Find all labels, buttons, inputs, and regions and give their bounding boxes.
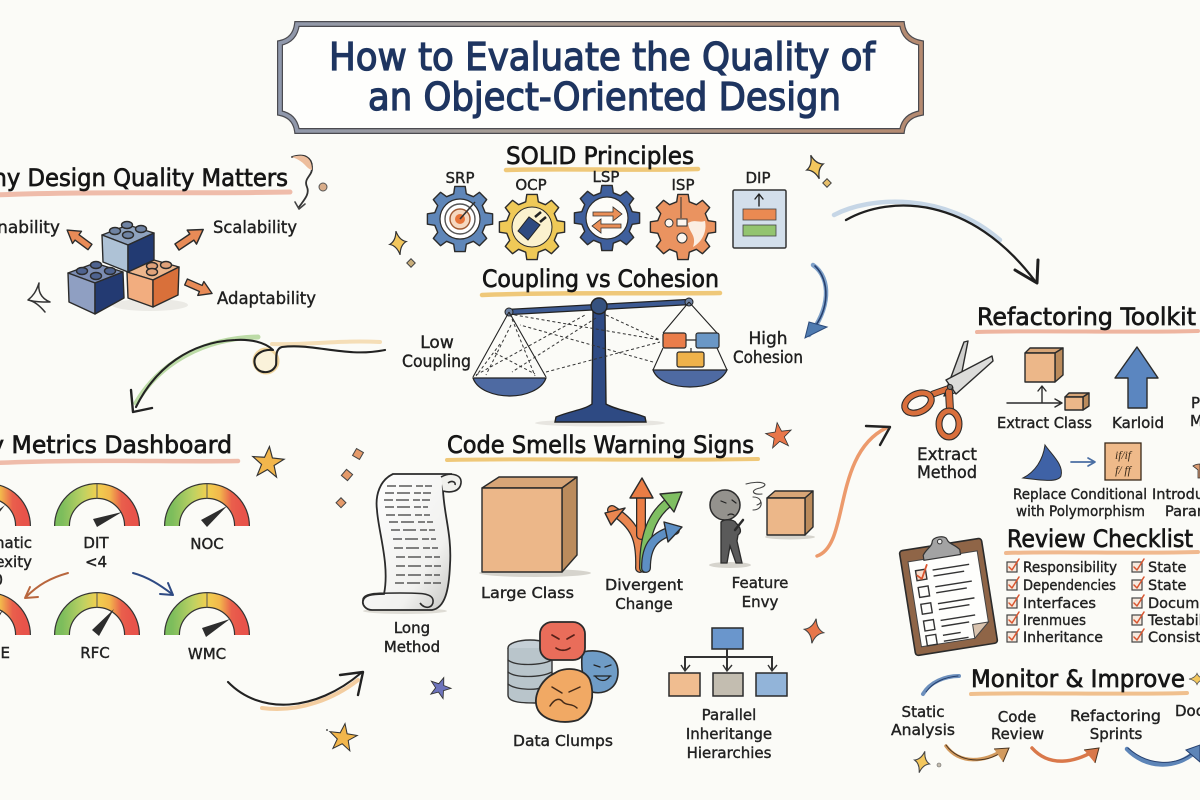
checklist: column one: Responsibility	[1023, 560, 1117, 576]
label: extract method: Method	[917, 463, 977, 483]
label: long method	[384, 619, 440, 656]
gauge: WMC: WMC	[188, 645, 226, 663]
checklist: column two	[1132, 559, 1200, 646]
gauge: RFC	[62, 592, 132, 662]
arrow: small blue	[133, 573, 173, 595]
icon: SRP gear target	[427, 186, 493, 252]
title banner	[280, 24, 921, 131]
label: refactoring sprints: Sprints	[1090, 725, 1142, 743]
icon: DIP box	[733, 190, 786, 248]
label: high cohesion: High	[748, 329, 788, 349]
label: hoist: Karloid	[1112, 414, 1164, 432]
label: high cohesion	[733, 329, 803, 368]
arrow: to adaptability	[183, 275, 215, 300]
arrow: review to sprints	[1032, 748, 1099, 763]
panel: why design quality matters	[0, 156, 327, 314]
label: SRP: SRP	[446, 169, 474, 187]
panel: SOLID principles	[388, 142, 831, 267]
icon: clipboard	[898, 530, 998, 656]
gauge: DIT: <4	[85, 553, 107, 571]
arrow: to scalability	[172, 223, 208, 254]
panel: monitor and improve	[891, 665, 1200, 775]
panel: review checklist	[898, 525, 1200, 656]
label: DIP: DIP	[745, 169, 771, 187]
label: low coupling: Coupling	[402, 352, 471, 372]
label: extract method	[917, 445, 977, 483]
icon: data clumps	[508, 622, 618, 722]
gauge: WMC	[172, 592, 242, 663]
icon: gold star bottom	[326, 722, 359, 752]
label: extract class: Extract Class	[997, 414, 1092, 432]
label: refactoring sprints: Refactoring	[1070, 707, 1161, 725]
gauge: DIT: DIT	[83, 534, 109, 552]
label: adaptability: Adaptability	[217, 289, 316, 309]
icon: long method scroll	[363, 474, 461, 614]
icon: scissors	[902, 341, 993, 437]
icon: feature envy figure and box	[709, 482, 815, 568]
label: introduce parameter	[1152, 487, 1200, 520]
label: low coupling	[402, 333, 471, 372]
label: parallel inheritance hierarchies: Inheritange	[686, 725, 772, 743]
icon: bracket flourish	[28, 283, 50, 312]
checklist: column two: State	[1148, 578, 1186, 594]
heading: refactoring toolkit: Refactoring Toolkit	[977, 303, 1196, 331]
arrow: sprints to documentation	[1127, 745, 1200, 764]
icon: purple star	[427, 674, 454, 700]
gauge: cyclomatic complexity	[0, 484, 32, 589]
label: LSP: LSP	[593, 168, 619, 186]
icon: gold sparkle bottom	[912, 749, 941, 775]
label: divergent change	[605, 576, 683, 613]
icon: parallel inheritance hierarchies	[669, 628, 787, 696]
label: refactoring sprints	[1070, 707, 1161, 743]
arrow: SOLID to refactoring toolkit	[834, 202, 1038, 283]
label: long method: Method	[384, 638, 440, 656]
arrow: blue curve to coupling	[805, 265, 827, 338]
label: parallel inheritance hierarchies: Hierarchies	[687, 744, 772, 762]
label: replace conditional with polymorphism: with Polymorphism	[1016, 504, 1145, 520]
heading: coupling vs cohesion: Coupling vs Cohesion	[482, 265, 719, 293]
icon: gold sparkle left	[388, 230, 415, 267]
icon: OCP gear plug	[499, 194, 565, 260]
checklist: column one: Dependencies	[1023, 578, 1116, 594]
heading: monitor and improve: Monitor & Improve	[971, 665, 1185, 693]
label: divergent change: Divergent	[605, 576, 683, 594]
label: code review	[991, 708, 1044, 743]
checklist: column two: State	[1148, 560, 1186, 576]
title banner: How to Evaluate the Quality of	[329, 35, 877, 79]
label: parallel inheritance hierarchies	[686, 706, 772, 762]
label: feature envy: Envy	[742, 593, 778, 611]
arrow: code smells to refactoring	[817, 426, 890, 556]
label: ISP: ISP	[672, 176, 694, 194]
label: static analysis	[891, 703, 955, 739]
checklist: column one: Interfaces	[1023, 596, 1096, 612]
icon: ISP gear puzzle	[650, 194, 716, 260]
label: long method: Long	[394, 619, 430, 637]
icon: divergent arrows	[605, 478, 682, 568]
label: feature envy: Feature	[732, 574, 788, 592]
icon: orange sparkle	[802, 617, 826, 645]
gauge: RFC: RFC	[80, 644, 110, 662]
panel: code smells warning signs	[363, 421, 826, 762]
label: code review: Review	[991, 725, 1044, 743]
icon: large class box	[479, 477, 591, 577]
icon: gold star	[251, 445, 285, 478]
panel: quality metrics dashboard	[0, 431, 363, 752]
label: large class: Large Class	[481, 584, 574, 602]
gauge: NOC: NOC	[190, 535, 224, 553]
icon: yellow sparkle	[1189, 673, 1200, 685]
label: divergent change: Change	[615, 595, 673, 613]
panel: refactoring toolkit	[902, 303, 1200, 520]
label: static analysis: Analysis	[891, 721, 955, 739]
label: high cohesion: Cohesion	[733, 348, 803, 368]
icon: LSP gear arrows	[574, 185, 640, 251]
label: extract method: Extract	[917, 445, 977, 465]
icon: balance scale	[473, 298, 727, 426]
label: replace conditional with polymorphism	[1013, 487, 1147, 520]
gauge: DIT	[62, 484, 132, 571]
icon: orange diamonds	[336, 449, 363, 508]
arrow: metrics to code smells	[228, 672, 363, 709]
checklist: column one: Inheritance	[1023, 630, 1103, 646]
arrow: coupling to metrics	[131, 337, 385, 412]
icon: small shape right	[1193, 464, 1200, 478]
arrow: to maintainability	[63, 224, 95, 253]
icon: extract class	[1007, 348, 1089, 410]
label: feature envy	[732, 574, 788, 611]
label: replace conditional with polymorphism: Replace Conditional	[1013, 487, 1147, 503]
icon: orange star	[764, 421, 793, 449]
label: code review: Code	[998, 708, 1036, 726]
label: scalability: Scalability	[213, 218, 297, 238]
icon: lego bricks	[68, 222, 188, 314]
heading: SOLID principles: SOLID Principles	[506, 142, 694, 170]
gauge: NOC	[172, 484, 242, 553]
arrow: static to review	[946, 745, 1009, 762]
checklist: column one	[1007, 559, 1117, 646]
checklist: column one: Irenmues	[1023, 613, 1086, 629]
icon: replace conditional	[1023, 443, 1141, 480]
arrow: arc above static analysis	[923, 676, 959, 694]
icon: replace conditional: if/if	[1115, 450, 1133, 462]
panel: coupling vs cohesion	[402, 265, 803, 426]
icon: curl flourish	[292, 156, 327, 209]
label: static analysis: Static	[902, 703, 944, 721]
label: data clumps: Data Clumps	[513, 732, 613, 750]
gauge: LCE	[0, 592, 23, 662]
label: low coupling: Low	[420, 333, 454, 353]
label: parallel inheritance hierarchies: Parallel	[702, 706, 756, 724]
icon: gold sparkle right	[803, 152, 831, 187]
label: OCP: OCP	[515, 176, 547, 194]
icon: blue up arrow	[1115, 347, 1158, 408]
title banner: an Object-Oriented Design	[368, 75, 841, 119]
arrow: small orange	[25, 573, 68, 598]
label: pull method	[1190, 394, 1200, 430]
heading: code smells warning signs: Code Smells Warning Signs	[447, 431, 754, 459]
icon: replace conditional: f/ ff	[1115, 465, 1133, 477]
